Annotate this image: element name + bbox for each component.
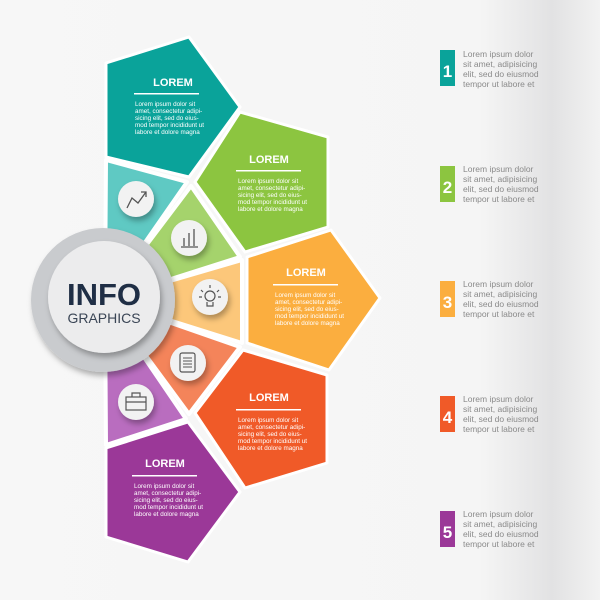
panel: teal section 1: LOREM <box>153 77 193 89</box>
panel: green section 2: labore et dolore magna <box>238 206 303 213</box>
list item 4: tempor ut labore et <box>463 424 535 434</box>
panel: purple section 5: amet, consectetur adipi- <box>134 490 201 497</box>
icon: bulb <box>192 279 228 315</box>
list item 1: elit, sed do eiusmod <box>463 69 539 79</box>
panel: teal section 1: Lorem ipsum dolor sit <box>135 101 195 108</box>
list item 3: 3 <box>443 293 452 312</box>
panel: red section 4: labore et dolore magna <box>238 445 303 452</box>
panel: red section 4: LOREM <box>249 392 289 404</box>
panel: small wedges <box>105 160 242 445</box>
icon: briefcase <box>118 384 154 420</box>
list item 4: 4 <box>443 408 453 427</box>
panel: red section 4: mod tempor incididunt ut <box>238 438 307 445</box>
panel: teal section 1 <box>106 37 240 177</box>
panel: orange section 3: labore et dolore magna <box>275 320 340 327</box>
list item 1: sit amet, adipisicing <box>463 59 537 69</box>
panel: teal section 1: amet, consectetur adipi- <box>135 108 202 115</box>
panel: teal section 1: sicing elit, sed do eius- <box>135 115 199 122</box>
list item 4: Lorem ipsum dolor <box>463 394 534 404</box>
title circle <box>31 228 175 372</box>
icon: document <box>170 345 206 381</box>
list item 2: 2 <box>443 178 452 197</box>
list item 4: sit amet, adipisicing <box>463 404 537 414</box>
list item 3 <box>440 279 539 319</box>
list item 2 <box>440 164 539 204</box>
list item 1: Lorem ipsum dolor <box>463 49 534 59</box>
panel: green section 2: mod tempor incididunt ut <box>238 199 307 206</box>
panel: orange section 3: mod tempor incididunt ut <box>275 313 344 320</box>
list item 5: elit, sed do eiusmod <box>463 529 539 539</box>
panel: green section 2: Lorem ipsum dolor sit <box>238 178 298 185</box>
list item 3: sit amet, adipisicing <box>463 289 537 299</box>
list item 2: elit, sed do eiusmod <box>463 184 539 194</box>
list item 3: tempor ut labore et <box>463 309 535 319</box>
panel: purple section 5: labore et dolore magna <box>134 511 199 518</box>
panel: red section 4: Lorem ipsum dolor sit <box>238 417 298 424</box>
list item 5: Lorem ipsum dolor <box>463 509 534 519</box>
list item 2: tempor ut labore et <box>463 194 535 204</box>
panel: orange section 3 <box>247 230 380 370</box>
list item 2: Lorem ipsum dolor <box>463 164 534 174</box>
panel: purple section 5: LOREM <box>145 458 185 470</box>
list item 3: Lorem ipsum dolor <box>463 279 534 289</box>
list item 5: sit amet, adipisicing <box>463 519 537 529</box>
list item 1: 1 <box>443 62 452 81</box>
list item 5 <box>440 509 539 549</box>
panel: orange section 3: Lorem ipsum dolor sit <box>275 292 335 299</box>
list item 1: tempor ut labore et <box>463 79 535 89</box>
list item 4: elit, sed do eiusmod <box>463 414 539 424</box>
list item 4 <box>440 394 539 434</box>
panel: teal section 1: labore et dolore magna <box>135 129 200 136</box>
icon: trend <box>118 181 154 217</box>
panel: green section 2 <box>195 112 328 252</box>
panel: red section 4: amet, consectetur adipi- <box>238 424 305 431</box>
panel: green section 2: sicing elit, sed do eius- <box>238 192 302 199</box>
list item 5: 5 <box>443 523 452 542</box>
panel: teal section 1: mod tempor incididunt ut <box>135 122 204 129</box>
title circle: INFO <box>67 277 141 312</box>
panel: green section 2: amet, consectetur adipi- <box>238 185 305 192</box>
panel: purple section 5: mod tempor incididunt ut <box>134 504 203 511</box>
panel: purple section 5: Lorem ipsum dolor sit <box>134 483 194 490</box>
panel: purple section 5: sicing elit, sed do eius- <box>134 497 198 504</box>
panel: green section 2: LOREM <box>249 154 289 166</box>
panel: red section 4 <box>195 350 327 488</box>
panel: orange section 3: LOREM <box>286 267 326 279</box>
title circle: GRAPHICS <box>67 310 141 326</box>
panel: purple section 5 <box>106 422 240 562</box>
list item 3: elit, sed do eiusmod <box>463 299 539 309</box>
icon: bar chart <box>171 220 207 256</box>
list item 2: sit amet, adipisicing <box>463 174 537 184</box>
list item 1 <box>440 49 539 89</box>
panel: orange section 3: amet, consectetur adipi- <box>275 299 342 306</box>
panel: red section 4: sicing elit, sed do eius- <box>238 431 302 438</box>
list item 5: tempor ut labore et <box>463 539 535 549</box>
panel: orange section 3: sicing elit, sed do eius- <box>275 306 339 313</box>
